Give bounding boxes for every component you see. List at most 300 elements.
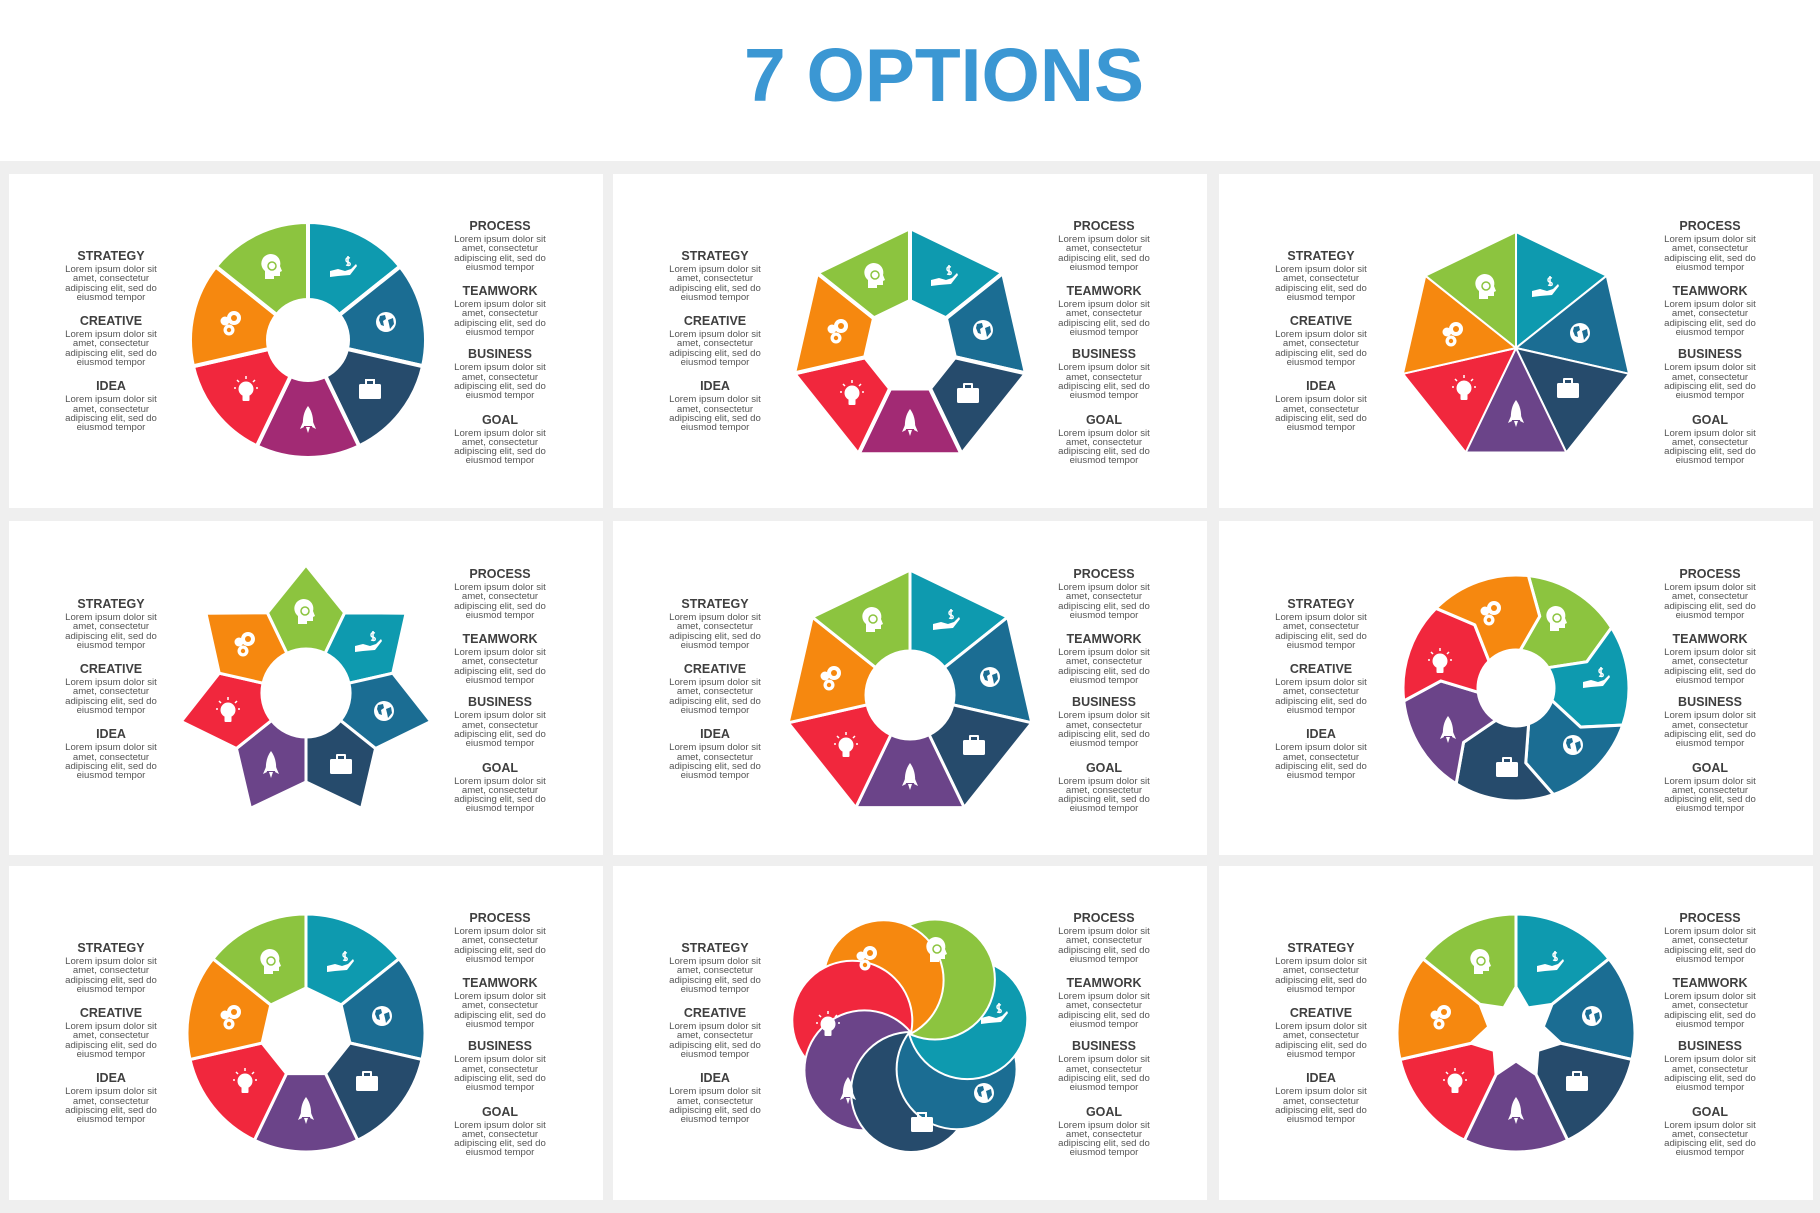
left labels: CREATIVE xyxy=(1290,1006,1352,1020)
right labels: adipiscing elit, sed do xyxy=(1058,794,1150,805)
left labels: adipiscing elit, sed do xyxy=(1275,761,1367,772)
left labels: adipiscing elit, sed do xyxy=(65,413,157,424)
left labels: amet, consectetur xyxy=(677,1030,753,1041)
left labels: adipiscing elit, sed do xyxy=(669,975,761,986)
right labels: PROCESS xyxy=(469,911,531,925)
right labels: BUSINESS xyxy=(1678,1039,1742,1053)
right labels: amet, consectetur xyxy=(462,720,538,731)
left labels: amet, consectetur xyxy=(677,686,753,697)
left labels: Lorem ipsum dolor sit xyxy=(669,1021,761,1032)
right labels: amet, consectetur xyxy=(1066,591,1142,602)
right labels: adipiscing elit, sed do xyxy=(1058,1073,1150,1084)
right labels: adipiscing elit, sed do xyxy=(454,1138,546,1149)
right labels: adipiscing elit, sed do xyxy=(1664,794,1756,805)
right labels: amet, consectetur xyxy=(1672,437,1748,448)
right labels: TEAMWORK xyxy=(1672,632,1748,646)
right labels: amet, consectetur xyxy=(1066,1064,1142,1075)
right labels: GOAL xyxy=(482,413,518,427)
right labels: eiusmod tempor xyxy=(466,803,534,814)
right labels: Lorem ipsum dolor sit xyxy=(454,1054,546,1065)
left labels: amet, consectetur xyxy=(677,752,753,763)
right labels: amet, consectetur xyxy=(1672,720,1748,731)
right labels: adipiscing elit, sed do xyxy=(454,1010,546,1021)
right labels: Lorem ipsum dolor sit xyxy=(454,991,546,1002)
right labels: eiusmod tempor xyxy=(466,1019,534,1030)
right labels: Lorem ipsum dolor sit xyxy=(454,362,546,373)
panel 3: solid heptagon xyxy=(1219,174,1813,508)
left labels: Lorem ipsum dolor sit xyxy=(65,612,157,623)
right labels: Lorem ipsum dolor sit xyxy=(1664,234,1756,245)
panel 8: swirl of circles xyxy=(613,866,1207,1200)
left labels: Lorem ipsum dolor sit xyxy=(65,264,157,275)
right labels: eiusmod tempor xyxy=(466,1082,534,1093)
left labels: adipiscing elit, sed do xyxy=(65,1105,157,1116)
right labels: eiusmod tempor xyxy=(1070,610,1138,621)
right labels: amet, consectetur xyxy=(462,1064,538,1075)
left labels: eiusmod tempor xyxy=(681,705,749,716)
right labels: BUSINESS xyxy=(1072,695,1136,709)
chart: star xyxy=(184,568,428,806)
title: 7 OPTIONS xyxy=(744,33,1144,117)
left labels: Lorem ipsum dolor sit xyxy=(669,612,761,623)
right labels: Lorem ipsum dolor sit xyxy=(1664,1054,1756,1065)
right labels: Lorem ipsum dolor sit xyxy=(454,299,546,310)
right labels: adipiscing elit, sed do xyxy=(1058,729,1150,740)
left labels: IDEA xyxy=(1306,727,1336,741)
right labels: eiusmod tempor xyxy=(1070,954,1138,965)
right labels: eiusmod tempor xyxy=(1070,675,1138,686)
left labels: Lorem ipsum dolor sit xyxy=(669,1086,761,1097)
right labels: amet, consectetur xyxy=(462,372,538,383)
left labels: amet, consectetur xyxy=(1283,404,1359,415)
right labels: amet, consectetur xyxy=(462,308,538,319)
left labels: amet, consectetur xyxy=(677,273,753,284)
left labels: Lorem ipsum dolor sit xyxy=(669,264,761,275)
right labels: amet, consectetur xyxy=(1672,308,1748,319)
right labels: BUSINESS xyxy=(468,1039,532,1053)
right labels: amet, consectetur xyxy=(1672,1064,1748,1075)
right labels: GOAL xyxy=(1692,413,1728,427)
left labels: eiusmod tempor xyxy=(77,984,145,995)
right labels: BUSINESS xyxy=(1072,1039,1136,1053)
right labels: eiusmod tempor xyxy=(1070,327,1138,338)
chart: swirl xyxy=(793,920,1026,1151)
right labels: amet, consectetur xyxy=(462,591,538,602)
right labels: BUSINESS xyxy=(1678,695,1742,709)
right labels: PROCESS xyxy=(1073,219,1135,233)
right labels: Lorem ipsum dolor sit xyxy=(1058,926,1150,937)
right labels: amet, consectetur xyxy=(462,1000,538,1011)
left labels: IDEA xyxy=(700,379,730,393)
left labels: eiusmod tempor xyxy=(681,1049,749,1060)
right labels: adipiscing elit, sed do xyxy=(454,666,546,677)
left labels: eiusmod tempor xyxy=(1287,770,1355,781)
left labels: adipiscing elit, sed do xyxy=(669,761,761,772)
left labels: eiusmod tempor xyxy=(77,1114,145,1125)
right labels: eiusmod tempor xyxy=(1676,262,1744,273)
right labels: BUSINESS xyxy=(1678,347,1742,361)
right labels: TEAMWORK xyxy=(462,976,538,990)
right labels: Lorem ipsum dolor sit xyxy=(1664,926,1756,937)
right labels: eiusmod tempor xyxy=(466,675,534,686)
right labels: amet, consectetur xyxy=(462,437,538,448)
left labels: adipiscing elit, sed do xyxy=(1275,348,1367,359)
right labels: Lorem ipsum dolor sit xyxy=(1664,299,1756,310)
left labels: Lorem ipsum dolor sit xyxy=(1275,677,1367,688)
left labels: amet, consectetur xyxy=(73,686,149,697)
chart: ring with star hole xyxy=(1398,916,1634,1150)
right labels: GOAL xyxy=(482,1105,518,1119)
left labels xyxy=(65,941,157,1125)
left labels: Lorem ipsum dolor sit xyxy=(1275,742,1367,753)
right labels: adipiscing elit, sed do xyxy=(1664,729,1756,740)
right labels: Lorem ipsum dolor sit xyxy=(454,776,546,787)
panel 1: circular ring xyxy=(9,174,603,508)
left labels: Lorem ipsum dolor sit xyxy=(669,677,761,688)
left labels: IDEA xyxy=(1306,379,1336,393)
left labels: IDEA xyxy=(96,1071,126,1085)
right labels: PROCESS xyxy=(1679,567,1741,581)
right labels: Lorem ipsum dolor sit xyxy=(1058,776,1150,787)
left labels: Lorem ipsum dolor sit xyxy=(65,956,157,967)
panel 4: star xyxy=(9,521,603,855)
right labels: PROCESS xyxy=(1679,911,1741,925)
right labels: adipiscing elit, sed do xyxy=(1664,381,1756,392)
panel 7: circle with heptagon hole xyxy=(9,866,603,1200)
right labels: amet, consectetur xyxy=(462,1129,538,1140)
left labels: adipiscing elit, sed do xyxy=(1275,1105,1367,1116)
right labels: amet, consectetur xyxy=(1672,372,1748,383)
left labels: STRATEGY xyxy=(77,597,145,611)
left labels: Lorem ipsum dolor sit xyxy=(1275,1021,1367,1032)
left labels: adipiscing elit, sed do xyxy=(1275,283,1367,294)
left labels: CREATIVE xyxy=(684,314,746,328)
right labels: amet, consectetur xyxy=(1672,935,1748,946)
right labels: Lorem ipsum dolor sit xyxy=(1664,776,1756,787)
left labels: eiusmod tempor xyxy=(681,984,749,995)
left labels: amet, consectetur xyxy=(73,1096,149,1107)
right labels: GOAL xyxy=(482,761,518,775)
right labels: eiusmod tempor xyxy=(1676,455,1744,466)
left labels: eiusmod tempor xyxy=(77,292,145,303)
left labels: IDEA xyxy=(96,379,126,393)
left labels xyxy=(65,597,157,781)
chart: ring with heptagon hole xyxy=(188,916,424,1150)
left labels: adipiscing elit, sed do xyxy=(65,696,157,707)
right labels xyxy=(1058,219,1150,466)
right labels: eiusmod tempor xyxy=(466,738,534,749)
right labels: adipiscing elit, sed do xyxy=(454,794,546,805)
right labels: eiusmod tempor xyxy=(1676,610,1744,621)
left labels: eiusmod tempor xyxy=(681,640,749,651)
right labels: adipiscing elit, sed do xyxy=(454,381,546,392)
right labels: TEAMWORK xyxy=(462,284,538,298)
right labels: eiusmod tempor xyxy=(1070,455,1138,466)
right labels: eiusmod tempor xyxy=(466,455,534,466)
left labels: adipiscing elit, sed do xyxy=(65,348,157,359)
left labels: CREATIVE xyxy=(684,1006,746,1020)
left labels: amet, consectetur xyxy=(73,965,149,976)
right labels: adipiscing elit, sed do xyxy=(1664,666,1756,677)
left labels: adipiscing elit, sed do xyxy=(669,348,761,359)
right labels: Lorem ipsum dolor sit xyxy=(1058,428,1150,439)
right labels: amet, consectetur xyxy=(1672,656,1748,667)
right labels: adipiscing elit, sed do xyxy=(1058,1010,1150,1021)
right labels: Lorem ipsum dolor sit xyxy=(454,234,546,245)
right labels: Lorem ipsum dolor sit xyxy=(1058,1120,1150,1131)
left labels: adipiscing elit, sed do xyxy=(669,283,761,294)
left labels: Lorem ipsum dolor sit xyxy=(1275,1086,1367,1097)
left labels: adipiscing elit, sed do xyxy=(669,631,761,642)
right labels: adipiscing elit, sed do xyxy=(454,446,546,457)
right labels: Lorem ipsum dolor sit xyxy=(454,428,546,439)
right labels: eiusmod tempor xyxy=(1070,803,1138,814)
right labels xyxy=(1664,219,1756,466)
left labels: amet, consectetur xyxy=(73,621,149,632)
right labels: eiusmod tempor xyxy=(1676,327,1744,338)
right labels: amet, consectetur xyxy=(1672,243,1748,254)
right labels: amet, consectetur xyxy=(1066,1000,1142,1011)
right labels: eiusmod tempor xyxy=(1070,262,1138,273)
right labels: adipiscing elit, sed do xyxy=(1058,666,1150,677)
right labels: Lorem ipsum dolor sit xyxy=(1664,1120,1756,1131)
left labels: eiusmod tempor xyxy=(1287,984,1355,995)
right labels: amet, consectetur xyxy=(1672,1129,1748,1140)
left labels: Lorem ipsum dolor sit xyxy=(65,677,157,688)
left labels: amet, consectetur xyxy=(73,1030,149,1041)
left labels: eiusmod tempor xyxy=(77,705,145,716)
left labels: CREATIVE xyxy=(1290,662,1352,676)
left labels: adipiscing elit, sed do xyxy=(65,1040,157,1051)
left labels: Lorem ipsum dolor sit xyxy=(1275,394,1367,405)
left labels: eiusmod tempor xyxy=(77,640,145,651)
right labels: adipiscing elit, sed do xyxy=(1664,1138,1756,1149)
right labels: Lorem ipsum dolor sit xyxy=(454,926,546,937)
left labels xyxy=(669,249,761,433)
left labels: amet, consectetur xyxy=(1283,621,1359,632)
panel 5: heptagon with circle hole xyxy=(613,521,1207,855)
left labels: amet, consectetur xyxy=(73,752,149,763)
right labels: TEAMWORK xyxy=(462,632,538,646)
left labels: adipiscing elit, sed do xyxy=(669,1040,761,1051)
left labels: Lorem ipsum dolor sit xyxy=(65,329,157,340)
chart: heptagon ring with round hole xyxy=(790,572,1030,806)
right labels: GOAL xyxy=(1692,1105,1728,1119)
right labels: adipiscing elit, sed do xyxy=(1664,1010,1756,1021)
left labels: adipiscing elit, sed do xyxy=(669,696,761,707)
left labels: adipiscing elit, sed do xyxy=(65,283,157,294)
left labels: eiusmod tempor xyxy=(1287,357,1355,368)
left labels: eiusmod tempor xyxy=(681,292,749,303)
chart: chevron ring xyxy=(1404,576,1628,800)
left labels: IDEA xyxy=(1306,1071,1336,1085)
left labels: CREATIVE xyxy=(80,1006,142,1020)
right labels: amet, consectetur xyxy=(1066,785,1142,796)
left labels: eiusmod tempor xyxy=(77,770,145,781)
right labels xyxy=(1664,911,1756,1158)
right labels: PROCESS xyxy=(469,219,531,233)
left labels: STRATEGY xyxy=(1287,249,1355,263)
right labels: adipiscing elit, sed do xyxy=(1664,253,1756,264)
left labels: Lorem ipsum dolor sit xyxy=(669,394,761,405)
left labels: amet, consectetur xyxy=(1283,273,1359,284)
right labels: TEAMWORK xyxy=(1066,284,1142,298)
right labels xyxy=(1058,567,1150,814)
right labels: Lorem ipsum dolor sit xyxy=(1058,299,1150,310)
left labels: adipiscing elit, sed do xyxy=(1275,975,1367,986)
right labels: eiusmod tempor xyxy=(466,1147,534,1158)
right labels: TEAMWORK xyxy=(1672,284,1748,298)
left labels: adipiscing elit, sed do xyxy=(65,631,157,642)
right labels: amet, consectetur xyxy=(1066,1129,1142,1140)
left labels: IDEA xyxy=(700,1071,730,1085)
right labels: eiusmod tempor xyxy=(466,390,534,401)
left labels xyxy=(65,249,157,433)
right labels: amet, consectetur xyxy=(462,935,538,946)
right labels: Lorem ipsum dolor sit xyxy=(1664,991,1756,1002)
left labels: STRATEGY xyxy=(77,941,145,955)
left labels: adipiscing elit, sed do xyxy=(1275,696,1367,707)
left labels: amet, consectetur xyxy=(73,404,149,415)
right labels: amet, consectetur xyxy=(462,656,538,667)
left labels: eiusmod tempor xyxy=(1287,640,1355,651)
right labels: PROCESS xyxy=(1073,911,1135,925)
right labels: TEAMWORK xyxy=(1066,632,1142,646)
left labels xyxy=(1275,941,1367,1125)
left labels: amet, consectetur xyxy=(1283,1096,1359,1107)
left labels: STRATEGY xyxy=(1287,597,1355,611)
right labels: amet, consectetur xyxy=(1066,935,1142,946)
left labels: adipiscing elit, sed do xyxy=(65,761,157,772)
right labels: eiusmod tempor xyxy=(1676,738,1744,749)
right labels: eiusmod tempor xyxy=(466,327,534,338)
right labels: Lorem ipsum dolor sit xyxy=(454,647,546,658)
left labels: amet, consectetur xyxy=(73,338,149,349)
left labels: IDEA xyxy=(700,727,730,741)
chart: solid heptagon xyxy=(1404,234,1628,452)
left labels: Lorem ipsum dolor sit xyxy=(65,1086,157,1097)
right labels: amet, consectetur xyxy=(462,785,538,796)
right labels: eiusmod tempor xyxy=(1676,1019,1744,1030)
left labels: STRATEGY xyxy=(681,941,749,955)
left labels: amet, consectetur xyxy=(73,273,149,284)
right labels: adipiscing elit, sed do xyxy=(1058,945,1150,956)
right labels xyxy=(1058,911,1150,1158)
right labels xyxy=(454,219,546,466)
right labels: adipiscing elit, sed do xyxy=(454,729,546,740)
right labels: Lorem ipsum dolor sit xyxy=(1664,428,1756,439)
right labels: eiusmod tempor xyxy=(466,610,534,621)
left labels: Lorem ipsum dolor sit xyxy=(1275,329,1367,340)
left labels: eiusmod tempor xyxy=(77,1049,145,1060)
right labels: Lorem ipsum dolor sit xyxy=(1664,647,1756,658)
right labels: eiusmod tempor xyxy=(1676,1082,1744,1093)
right labels: adipiscing elit, sed do xyxy=(1058,381,1150,392)
left labels: Lorem ipsum dolor sit xyxy=(1275,612,1367,623)
left labels: adipiscing elit, sed do xyxy=(65,975,157,986)
right labels xyxy=(454,567,546,814)
right labels: eiusmod tempor xyxy=(1676,390,1744,401)
left labels: amet, consectetur xyxy=(677,621,753,632)
left labels: amet, consectetur xyxy=(1283,338,1359,349)
left labels: IDEA xyxy=(96,727,126,741)
panel 2: heptagon with heptagon hole xyxy=(613,174,1207,508)
right labels: adipiscing elit, sed do xyxy=(454,601,546,612)
left labels: eiusmod tempor xyxy=(77,422,145,433)
left labels: Lorem ipsum dolor sit xyxy=(669,956,761,967)
left labels xyxy=(1275,597,1367,781)
right labels: adipiscing elit, sed do xyxy=(454,253,546,264)
left labels: amet, consectetur xyxy=(677,1096,753,1107)
right labels: adipiscing elit, sed do xyxy=(1664,945,1756,956)
left labels: amet, consectetur xyxy=(677,965,753,976)
right labels: eiusmod tempor xyxy=(1676,675,1744,686)
left labels: Lorem ipsum dolor sit xyxy=(669,742,761,753)
left labels: adipiscing elit, sed do xyxy=(1275,1040,1367,1051)
right labels: Lorem ipsum dolor sit xyxy=(1058,647,1150,658)
left labels: amet, consectetur xyxy=(677,404,753,415)
right labels: amet, consectetur xyxy=(1066,243,1142,254)
panel 9: circle with star hole xyxy=(1219,866,1813,1200)
right labels: Lorem ipsum dolor sit xyxy=(1058,991,1150,1002)
right labels: amet, consectetur xyxy=(1672,785,1748,796)
left labels: STRATEGY xyxy=(681,249,749,263)
left labels: CREATIVE xyxy=(1290,314,1352,328)
chart: heptagon ring xyxy=(796,231,1024,452)
left labels xyxy=(669,597,761,781)
right labels: eiusmod tempor xyxy=(1070,1082,1138,1093)
right labels: adipiscing elit, sed do xyxy=(1664,446,1756,457)
right labels: adipiscing elit, sed do xyxy=(454,945,546,956)
chart: ring xyxy=(192,224,424,456)
right labels: amet, consectetur xyxy=(1066,437,1142,448)
left labels: amet, consectetur xyxy=(1283,1030,1359,1041)
right labels: TEAMWORK xyxy=(1066,976,1142,990)
right labels: eiusmod tempor xyxy=(1676,954,1744,965)
left labels: CREATIVE xyxy=(80,662,142,676)
right labels: GOAL xyxy=(1086,761,1122,775)
left labels: adipiscing elit, sed do xyxy=(669,413,761,424)
right labels: eiusmod tempor xyxy=(1070,1147,1138,1158)
left labels: CREATIVE xyxy=(684,662,746,676)
right labels: Lorem ipsum dolor sit xyxy=(1664,362,1756,373)
right labels: amet, consectetur xyxy=(1672,591,1748,602)
right labels: adipiscing elit, sed do xyxy=(1664,1073,1756,1084)
right labels: adipiscing elit, sed do xyxy=(1058,318,1150,329)
right labels: eiusmod tempor xyxy=(1676,1147,1744,1158)
right labels: PROCESS xyxy=(1679,219,1741,233)
right labels: amet, consectetur xyxy=(1066,656,1142,667)
left labels xyxy=(669,941,761,1125)
left labels: Lorem ipsum dolor sit xyxy=(65,742,157,753)
right labels: eiusmod tempor xyxy=(466,262,534,273)
right labels xyxy=(454,911,546,1158)
left labels: STRATEGY xyxy=(681,597,749,611)
right labels: adipiscing elit, sed do xyxy=(1664,318,1756,329)
left labels: STRATEGY xyxy=(1287,941,1355,955)
right labels: Lorem ipsum dolor sit xyxy=(1058,582,1150,593)
left labels: eiusmod tempor xyxy=(681,770,749,781)
left labels xyxy=(1275,249,1367,433)
right labels: Lorem ipsum dolor sit xyxy=(454,1120,546,1131)
right labels: Lorem ipsum dolor sit xyxy=(454,582,546,593)
right labels: Lorem ipsum dolor sit xyxy=(1058,1054,1150,1065)
left labels: amet, consectetur xyxy=(1283,686,1359,697)
right labels: BUSINESS xyxy=(468,695,532,709)
right labels: eiusmod tempor xyxy=(1070,1019,1138,1030)
left labels: adipiscing elit, sed do xyxy=(669,1105,761,1116)
right labels: GOAL xyxy=(1086,1105,1122,1119)
